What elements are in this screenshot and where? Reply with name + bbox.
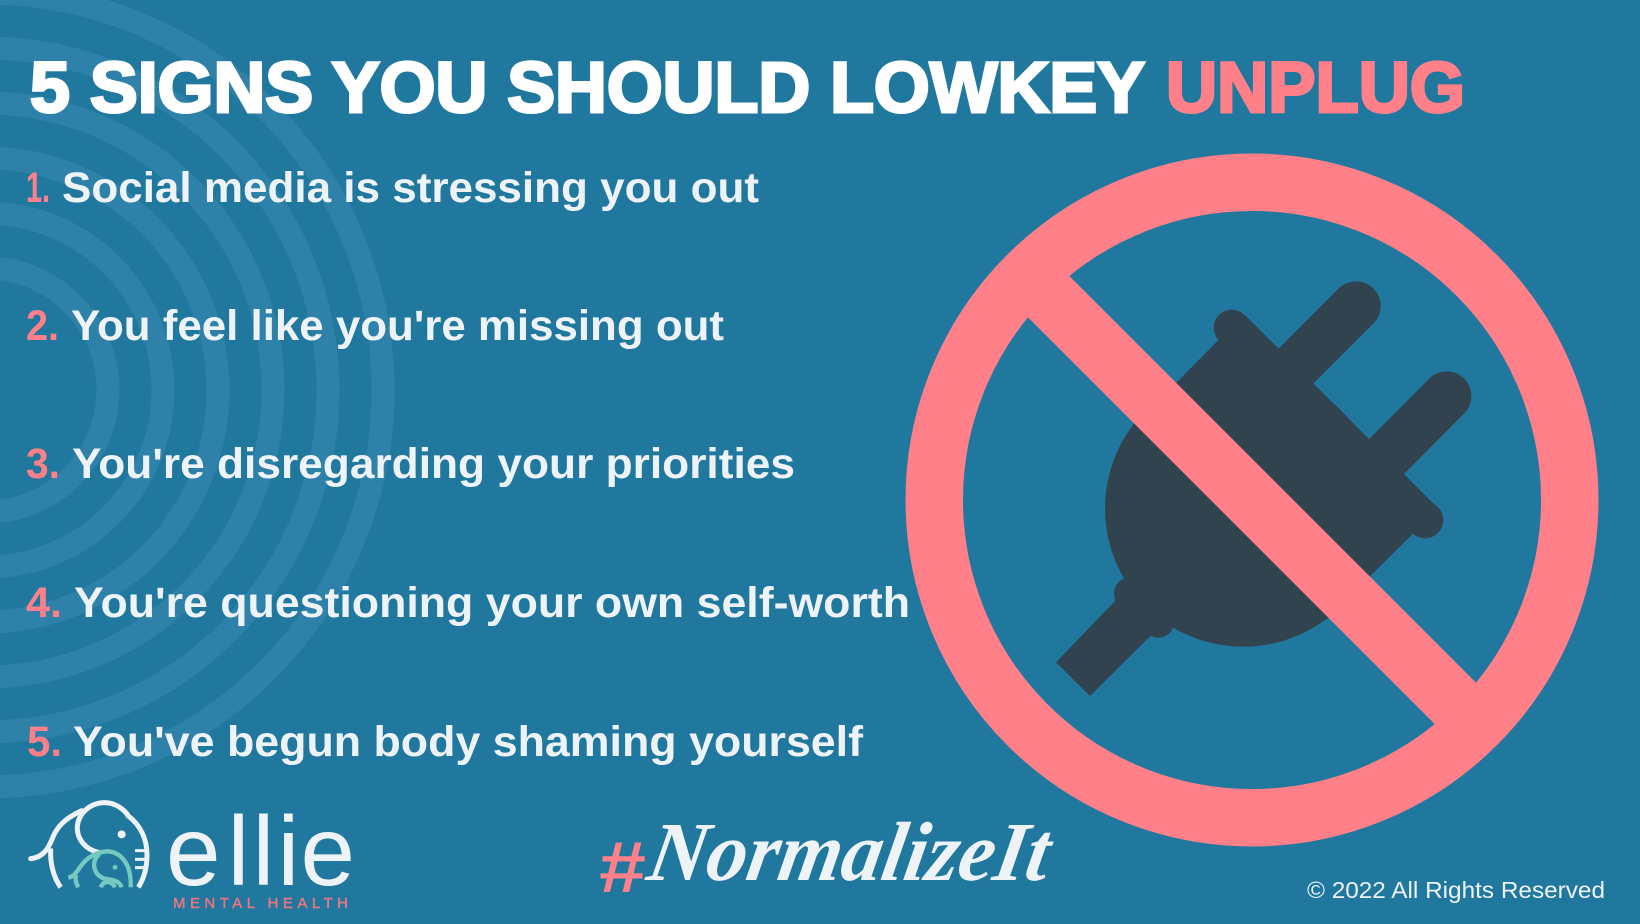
sign 1: Social media is stressing you out — [62, 164, 759, 212]
title: UNPLUG — [1166, 49, 1465, 128]
sign 4: You're questioning your own self-worth — [74, 579, 910, 627]
sign 5: 5. — [27, 718, 62, 766]
hashtag: #NormalizeIt: # — [599, 828, 646, 908]
sign 2: 2. — [26, 302, 59, 350]
icon: plug — [1056, 306, 1447, 696]
sign 3: You're disregarding your priorities — [72, 440, 795, 488]
logo tagline: MENTAL HEALTH — [173, 895, 348, 912]
sign 3: 3. — [26, 440, 60, 488]
icon: elephant and calf — [31, 803, 147, 887]
icon: prohibition sign — [934, 182, 1570, 818]
sign 5: You've begun body shaming yourself — [73, 718, 864, 766]
logo wordmark: ellie — [166, 796, 355, 906]
title: 5 SIGNS YOU SHOULD LOWKEY — [30, 49, 1145, 128]
hashtag: #NormalizeIt: NormalizeIt — [641, 807, 1060, 899]
icon: crossed-out plug — [934, 182, 1570, 818]
list of five signs — [26, 164, 910, 766]
sign 2: You feel like you're missing out — [71, 302, 724, 350]
sign 1: 1. — [26, 164, 50, 212]
copyright: © 2022 All Rights Reserved — [1307, 877, 1605, 903]
sign 4: 4. — [26, 579, 62, 627]
logo: ellie mental health — [31, 796, 355, 912]
